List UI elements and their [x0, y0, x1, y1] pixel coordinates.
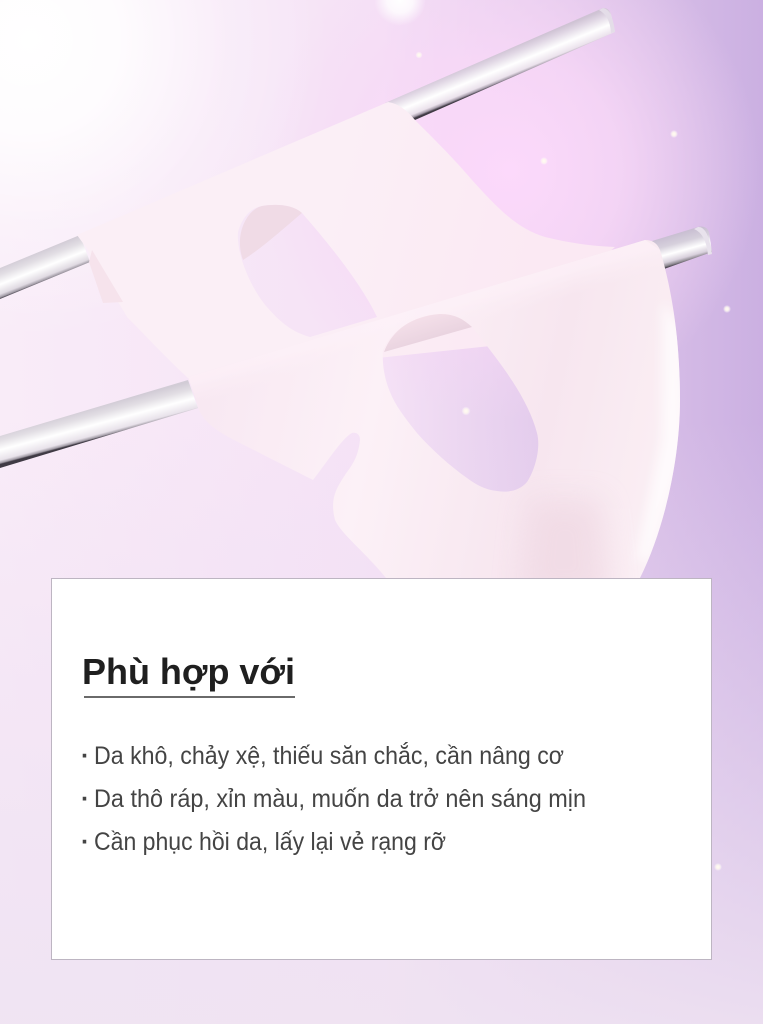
heading: Phù hợp với: [82, 651, 295, 692]
front mask: [215, 240, 680, 578]
front rod: [0, 227, 712, 468]
suitability list: Da khô, chảy xệ, thiếu săn chắc, cần nâng cơ: [94, 741, 564, 770]
sparkles: [416, 52, 731, 871]
suitability list: Cần phục hồi da, lấy lại vẻ rạng rỡ: [94, 828, 446, 856]
list item 3: ·: [81, 828, 89, 856]
suitability list: Da thô ráp, xỉn màu, muốn da trở nên sáng mịn: [94, 785, 586, 813]
back rod: [0, 8, 615, 299]
list item 2: ·: [81, 785, 89, 813]
back mask flap: [89, 250, 123, 303]
list item 1: ·: [81, 742, 89, 770]
back mask eye interior: [240, 205, 302, 260]
heading underline: [84, 696, 295, 698]
back mask: [77, 102, 615, 378]
front mask eye interior: [384, 314, 472, 352]
suitability list: [81, 741, 586, 856]
text panel: [52, 578, 712, 960]
